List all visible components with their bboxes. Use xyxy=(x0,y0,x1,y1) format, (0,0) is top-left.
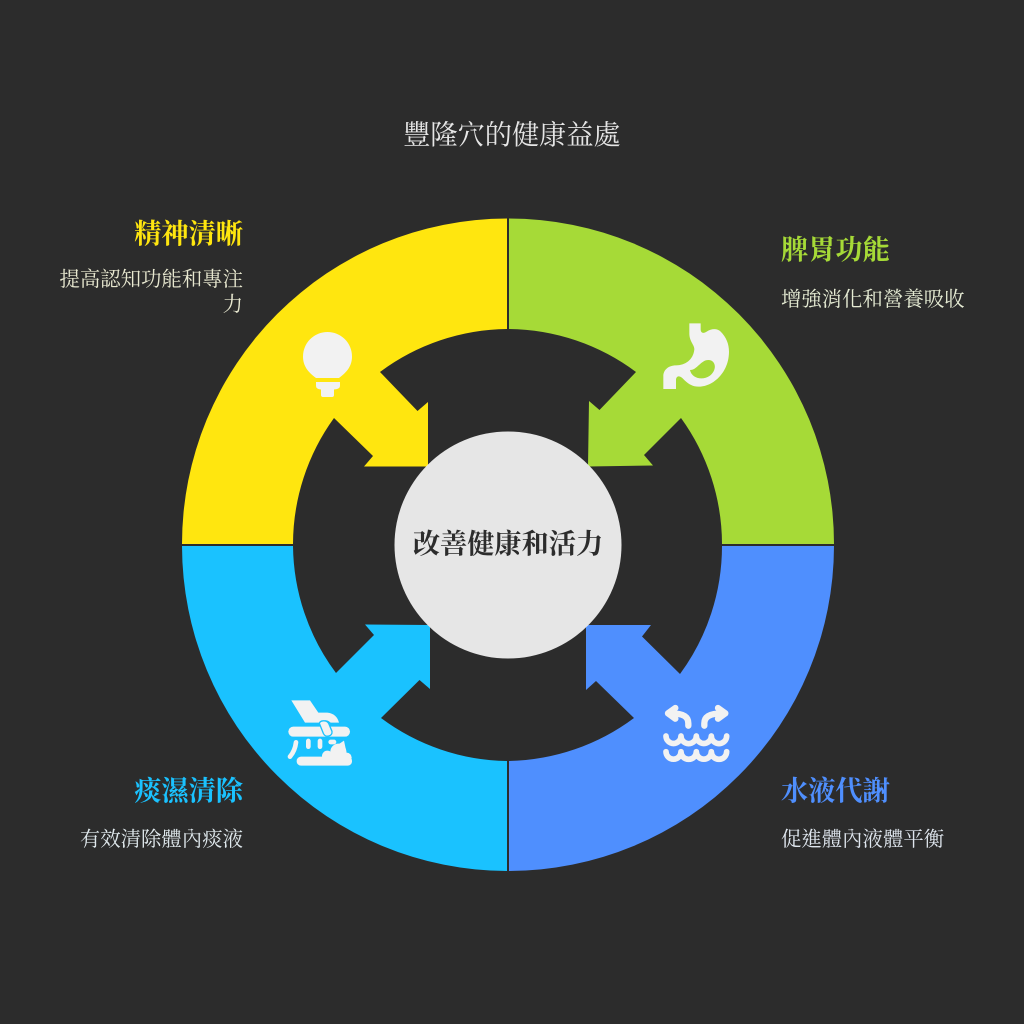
icon: brush sweeping phlegm xyxy=(288,700,352,766)
heading: 精神清晰 xyxy=(134,219,243,249)
label: spleen and stomach xyxy=(781,235,965,311)
panel: fluid metabolism segment xyxy=(509,546,834,871)
cyan arrow segment xyxy=(182,546,507,871)
panel: mental clarity segment xyxy=(182,218,507,544)
description: 增強消化和營養吸收 xyxy=(781,288,965,311)
description: 促進體內液體平衡 xyxy=(781,828,944,851)
label: fluid metabolism xyxy=(781,776,944,851)
yellow arrow segment xyxy=(182,218,507,544)
heading: 痰濕清除 xyxy=(134,776,245,806)
center label: 改善健康和活力 xyxy=(413,529,603,559)
description: 提高認知功能和專注 xyxy=(59,268,243,291)
heading: 脾胃功能 xyxy=(781,235,890,265)
green arrow segment xyxy=(509,218,834,544)
center circle xyxy=(394,432,622,658)
panel: spleen and stomach segment xyxy=(509,218,834,544)
label: phlegm clearing xyxy=(80,776,245,851)
description: 力 xyxy=(223,293,243,316)
icon: stomach xyxy=(663,323,729,389)
label: mental clarity xyxy=(59,219,243,316)
heading: 水液代謝 xyxy=(781,776,890,806)
icon: water with arrows xyxy=(666,708,727,759)
panel: phlegm clearing segment xyxy=(182,546,507,871)
description: 有效清除體內痰液 xyxy=(80,828,243,851)
icon: light bulb xyxy=(303,332,352,397)
title: 豐隆穴的健康益處 xyxy=(403,120,621,150)
blue arrow segment xyxy=(509,546,834,871)
